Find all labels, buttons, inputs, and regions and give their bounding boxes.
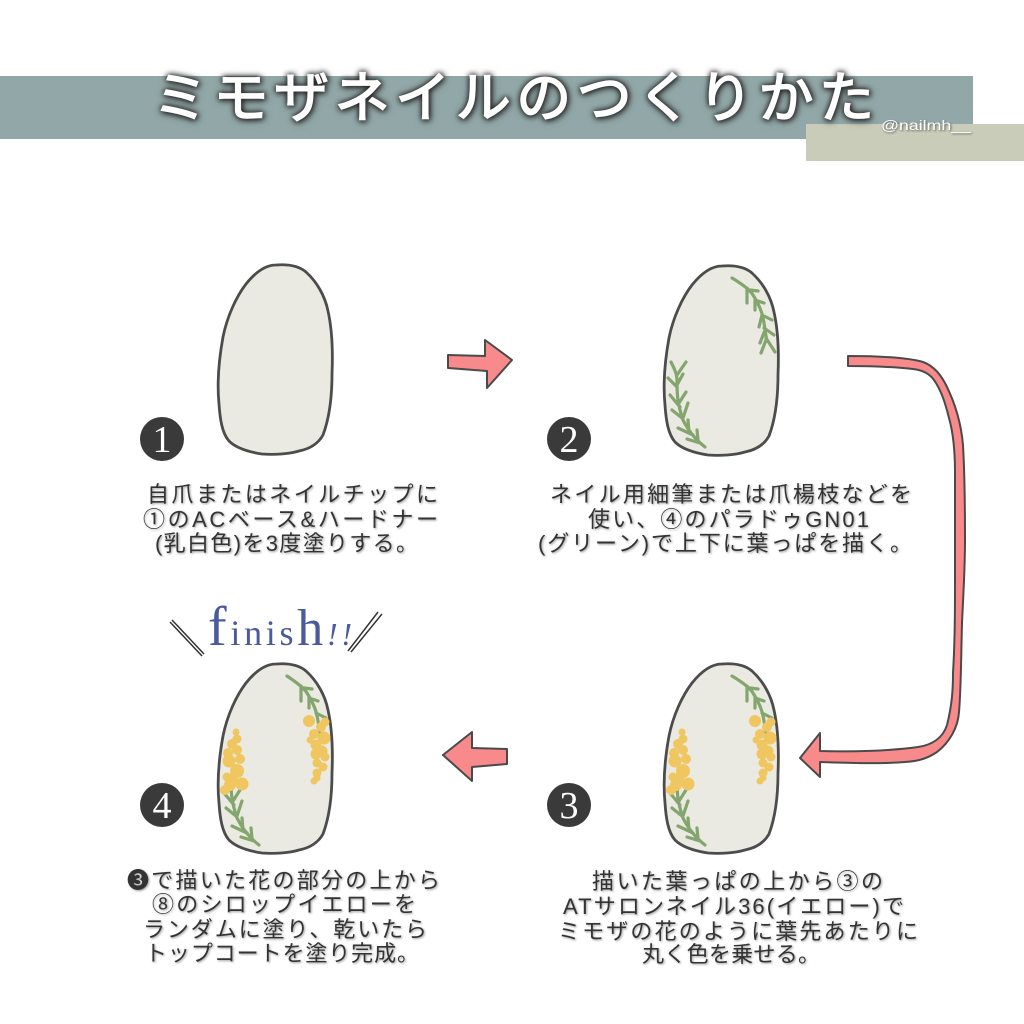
step 4 text: トップコートを塗り完成。 [145,941,419,966]
step 2 text: ネイル用細筆または爪楊枝などを [550,482,912,507]
arrow: step 3 to 4 [443,732,507,781]
handle: @nailmh__ [881,117,971,133]
finish label [170,596,382,658]
step 1 text: (乳白色)を3度塗りする。 [155,531,418,556]
step 3 text: ミモザの花のように葉先あたりに [558,919,918,944]
step 1 text: ①のACベース&ハードナー [143,507,438,532]
step badge 2 [547,417,591,461]
title band [0,76,973,139]
step 1 text [143,482,438,556]
arrow: step 1 to 2 [448,340,512,388]
step 3 text: 丸く色を乗せる。 [642,942,820,967]
step badge 2: 2 [560,419,578,461]
accent block [806,124,1024,161]
step 2 text: 使い、④のパラドゥGN01 [588,507,869,532]
step 2 text: (グリーン)で上下に葉っぱを描く。 [538,531,912,556]
step badge 4 [140,783,184,827]
step 4 text: ランダムに塗り、乾いたら [143,917,427,942]
step 3 text [558,869,918,967]
title: ミモザネイルのつくりかた [153,67,874,129]
step 2 text [538,482,912,556]
step 4 nail with leaves and flowers [218,664,332,853]
step 1 text: 自爪またはネイルチップに [147,482,438,507]
arrow: step 2 to 3 [800,356,965,777]
finish label: finish!! [208,596,352,658]
step 1 nail [218,265,332,454]
step badge 1: 1 [152,419,172,461]
step badge 1 [140,417,184,461]
step 3 nail with leaves and flowers [664,664,778,853]
step 4 text: ⑧のシロップイエローを [152,892,416,917]
step 3 text: ATサロンネイル36(イエロー)で [563,894,904,919]
step 2 nail with leaves [664,266,778,455]
step badge 4: 4 [152,785,172,827]
step 4 text: ❸で描いた花の部分の上から [127,868,440,893]
step 3 text: 描いた葉っぱの上から③の [592,869,883,894]
step badge 3 [547,783,591,827]
step 4 text [127,868,440,966]
step badge 3: 3 [560,785,578,827]
